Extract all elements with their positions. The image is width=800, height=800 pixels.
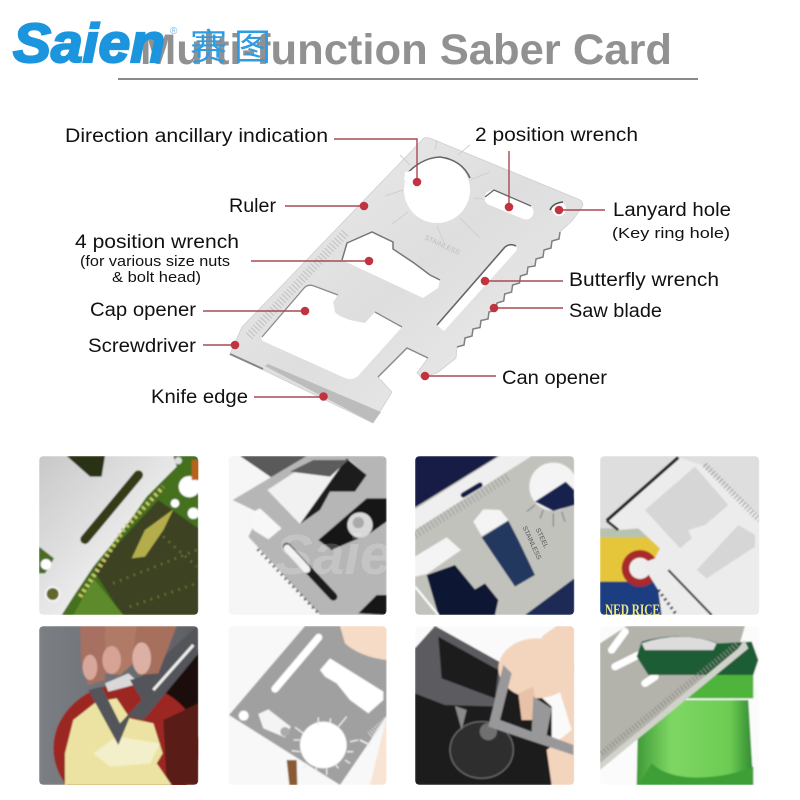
lanyard hole <box>552 202 566 216</box>
photo: wrench on dark blue <box>415 456 577 615</box>
photo: sawing a branch <box>39 456 200 615</box>
photo: card with compass <box>228 626 387 785</box>
label: 2 position wrench: 2 position wrench <box>475 125 638 146</box>
knife edge bevel <box>265 364 381 423</box>
label: 4 position wrench: 4 position wrench <box>75 232 239 253</box>
label: Cap opener <box>90 300 309 321</box>
label: Ruler: Ruler <box>229 196 277 217</box>
photo: wrench on dark blue: STAINLESS <box>521 525 542 561</box>
brand logo: Saien <box>13 12 165 74</box>
cap opener hole <box>261 285 402 379</box>
label: Butterfly wrench <box>481 270 719 291</box>
label: 4 position wrench <box>75 232 373 286</box>
label: Cap opener: Cap opener <box>90 300 197 321</box>
label: Can opener <box>421 368 608 389</box>
label: Knife edge <box>151 387 328 408</box>
brand logo: ® <box>170 26 178 37</box>
photo: opening a can: NED RICE <box>605 602 660 619</box>
label: Lanyard hole: (Key ring hole) <box>612 225 730 242</box>
two position wrench hole <box>492 198 526 212</box>
photo: peeling an apple <box>39 626 200 800</box>
label: Saw blade: Saw blade <box>569 301 662 322</box>
label: Knife edge: Knife edge <box>151 387 248 408</box>
ruler ticks <box>249 232 346 336</box>
label: Saw blade <box>490 301 662 322</box>
brand logo <box>13 12 278 74</box>
can opener notch edge <box>378 348 428 377</box>
photo: tightening a bolt <box>230 456 387 615</box>
label: Can opener: Can opener <box>502 368 608 389</box>
label: Lanyard hole: Lanyard hole <box>613 200 731 221</box>
photo: camera screw <box>415 626 575 785</box>
photo: tightening a bolt: Saien <box>275 524 426 587</box>
compass hole <box>385 140 492 245</box>
butterfly wrench slot <box>437 245 517 331</box>
photo: wrench on dark blue: STEEL <box>534 527 549 550</box>
four position wrench hole <box>342 232 440 298</box>
label: Butterfly wrench: Butterfly wrench <box>569 270 719 291</box>
label: Screwdriver: Screwdriver <box>88 336 197 357</box>
label: 4 position wrench: & bolt head) <box>112 269 201 286</box>
saw teeth shading <box>457 232 560 347</box>
label: Ruler <box>229 196 368 217</box>
photo: opening a can <box>600 456 759 619</box>
card body <box>230 138 583 423</box>
multi-tool card illustration <box>230 138 583 423</box>
engraved steel text: STAINLESS <box>423 234 461 257</box>
label: Direction ancillary indication <box>65 126 421 186</box>
card underside edge <box>230 354 263 369</box>
photo: opening a bottle <box>600 626 759 785</box>
title: Multi-function Saber Card <box>140 26 672 74</box>
label: 2 position wrench <box>475 125 638 211</box>
label: 4 position wrench: (for various size nuts <box>80 253 230 270</box>
label: Lanyard hole <box>555 200 731 242</box>
title underline <box>118 78 698 80</box>
label: Direction ancillary indication: Direction ancillary indication <box>65 126 328 147</box>
label: Screwdriver <box>88 336 239 357</box>
brand logo: 赛图 <box>190 27 278 68</box>
